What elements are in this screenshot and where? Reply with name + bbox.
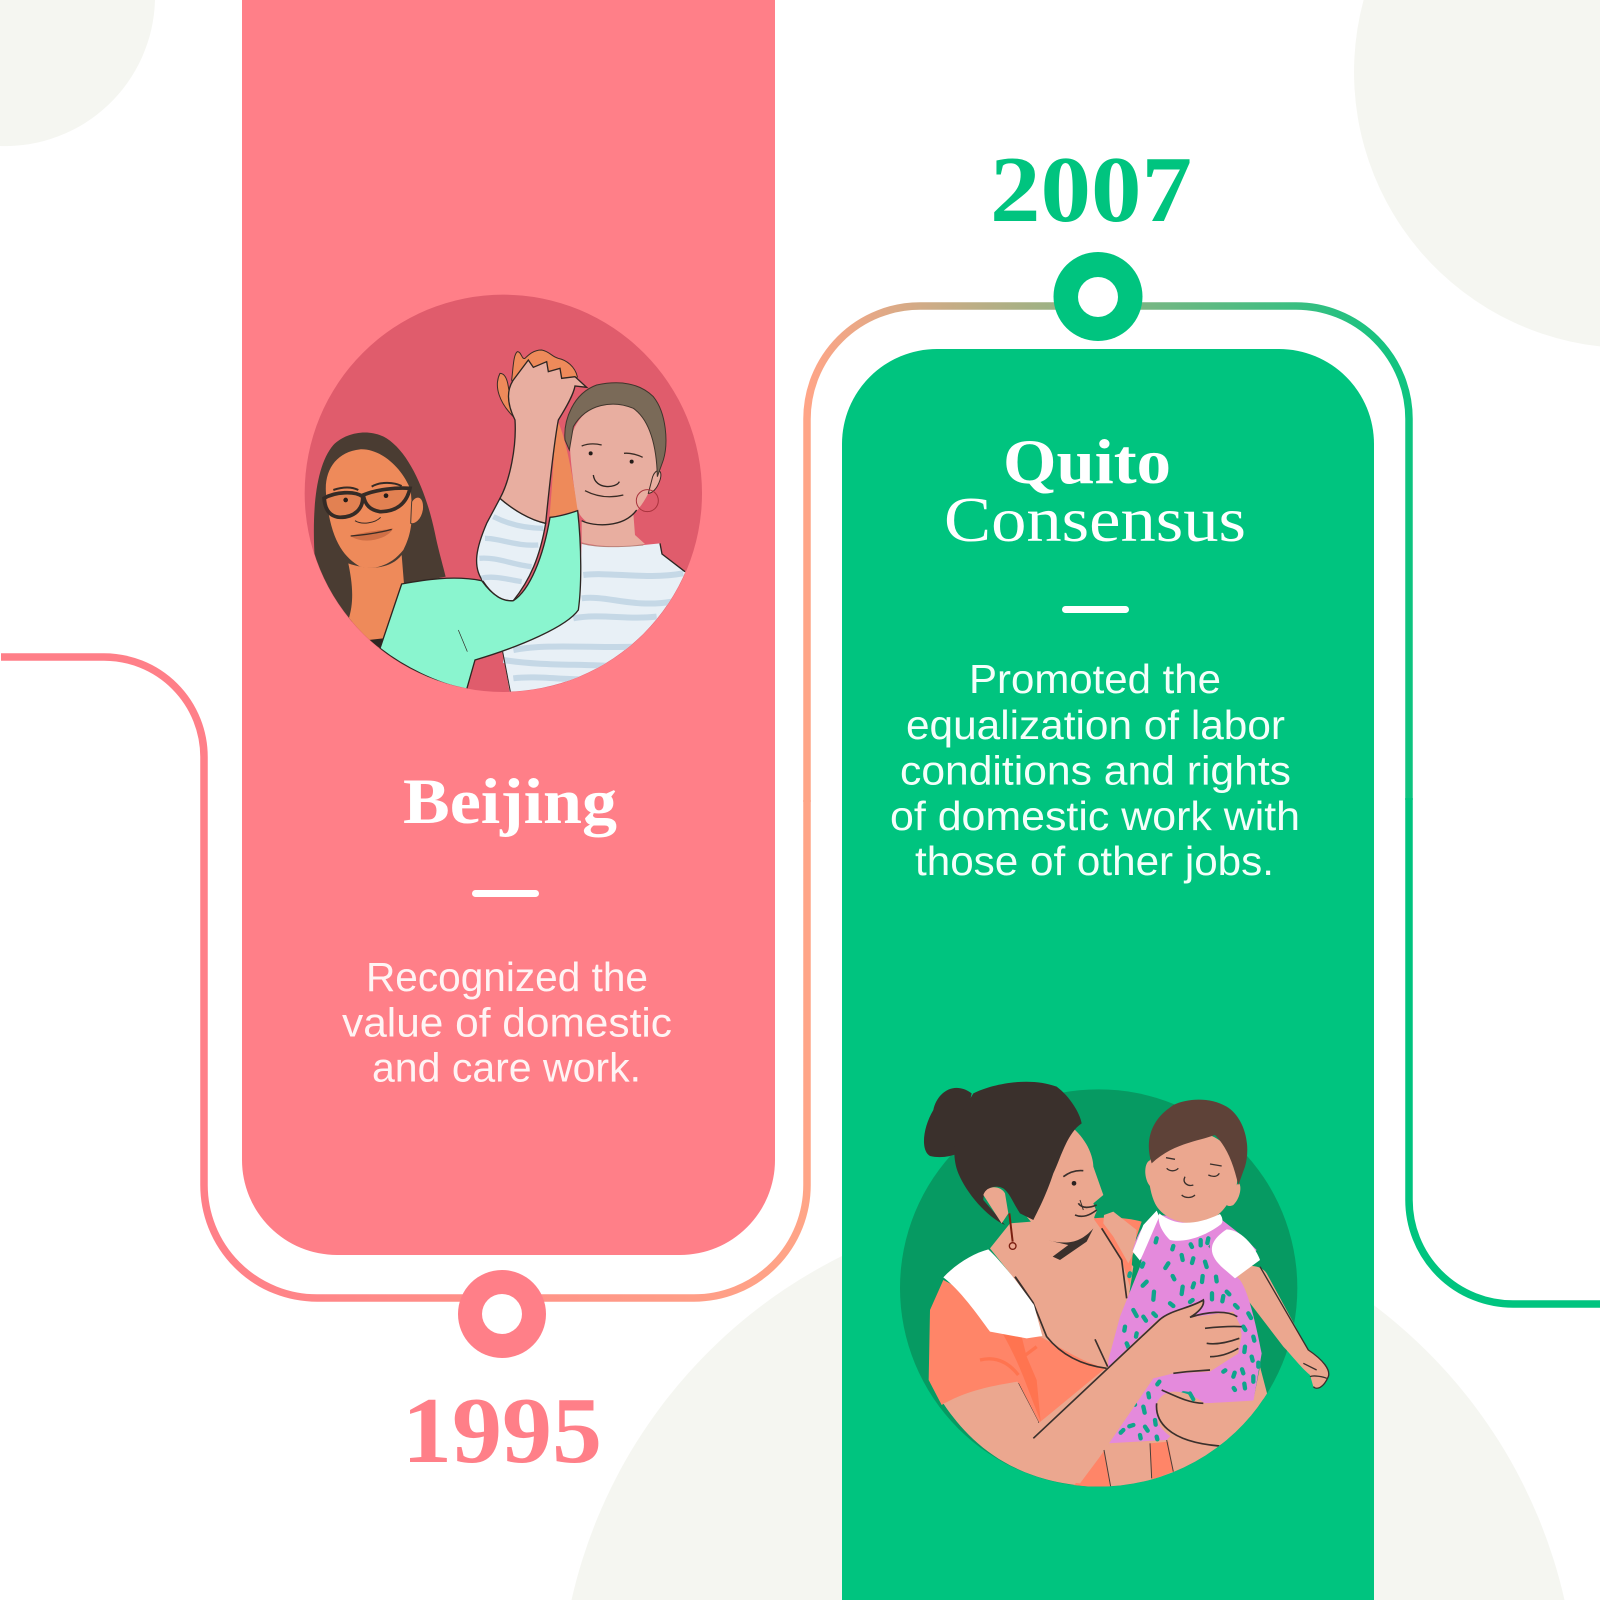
baby hand on shoulder [1103, 1212, 1137, 1263]
orange strap [1093, 1218, 1142, 1287]
right woman hair [565, 383, 666, 477]
illustration: mother holding baby [900, 1082, 1329, 1487]
pink card [242, 0, 775, 1255]
heading: Quito Consensus: Quito [1003, 426, 1171, 497]
node: 1995 marker [458, 1270, 546, 1358]
baby sleeves [1133, 1211, 1159, 1261]
baby collar [1159, 1213, 1222, 1241]
hair [954, 1082, 1082, 1225]
lower hand [1157, 1392, 1262, 1447]
pink dress [1107, 1215, 1262, 1443]
panel: Quito Consensus 2007 [842, 349, 1374, 1600]
description: Beijing: Recognized the [366, 954, 648, 1000]
year: 2007: 2007 [990, 138, 1192, 242]
hair bun [924, 1088, 972, 1157]
left woman face [326, 449, 412, 568]
body skin base [944, 1366, 1264, 1486]
left sleeve striped [477, 498, 546, 601]
baby right arm [1236, 1266, 1328, 1388]
heading: Quito Consensus [944, 426, 1246, 555]
pink arm and hand [500, 360, 587, 523]
white collar [943, 1249, 1042, 1338]
dress spots [1121, 1238, 1258, 1439]
right woman face [570, 402, 661, 526]
heading: Quito Consensus: Consensus [944, 485, 1246, 555]
description: Beijing: value of domestic [342, 1000, 672, 1046]
left woman neck [348, 555, 404, 648]
orange forearm and fingers [549, 420, 578, 517]
left woman hair [314, 433, 446, 623]
description: Quito Consensus: of domestic work with [890, 793, 1300, 839]
baby hair [1149, 1100, 1247, 1185]
year: 1995: 1995 [402, 1379, 602, 1483]
timeline connector line [1, 306, 1600, 1304]
description: Quito Consensus [890, 656, 1300, 884]
illustration: two women holding hands [304, 294, 702, 692]
divider [472, 890, 539, 897]
heading: Beijing: Beijing [403, 766, 617, 838]
description: Quito Consensus: equalization of labor [906, 702, 1285, 748]
baby leg [1254, 1367, 1267, 1399]
panel: Beijing 1995 [242, 0, 775, 1255]
baby head [1149, 1133, 1238, 1223]
green card [842, 349, 1374, 1600]
description: Quito Consensus: Promoted the [969, 656, 1221, 702]
neck shadow [1047, 1228, 1093, 1260]
description: Quito Consensus: those of other jobs. [915, 838, 1274, 884]
ear and earring [983, 1187, 1008, 1223]
mother arm and hand [943, 1300, 1242, 1483]
glasses [324, 488, 410, 517]
divider [1062, 606, 1129, 613]
description: Beijing: and care work. [372, 1044, 641, 1090]
orange top [929, 1280, 1113, 1423]
right woman features [589, 451, 593, 455]
woman face [1026, 1130, 1104, 1222]
striped shirt [502, 543, 686, 692]
right woman neck [582, 513, 645, 546]
node: 2007 marker [1054, 252, 1142, 341]
chest skin [990, 1217, 1133, 1368]
baby features [1166, 1158, 1222, 1197]
description: Quito Consensus: conditions and rights [900, 748, 1291, 794]
mint sleeve [380, 511, 581, 689]
description: Beijing [342, 954, 672, 1090]
neckline stroke [1033, 1303, 1108, 1368]
